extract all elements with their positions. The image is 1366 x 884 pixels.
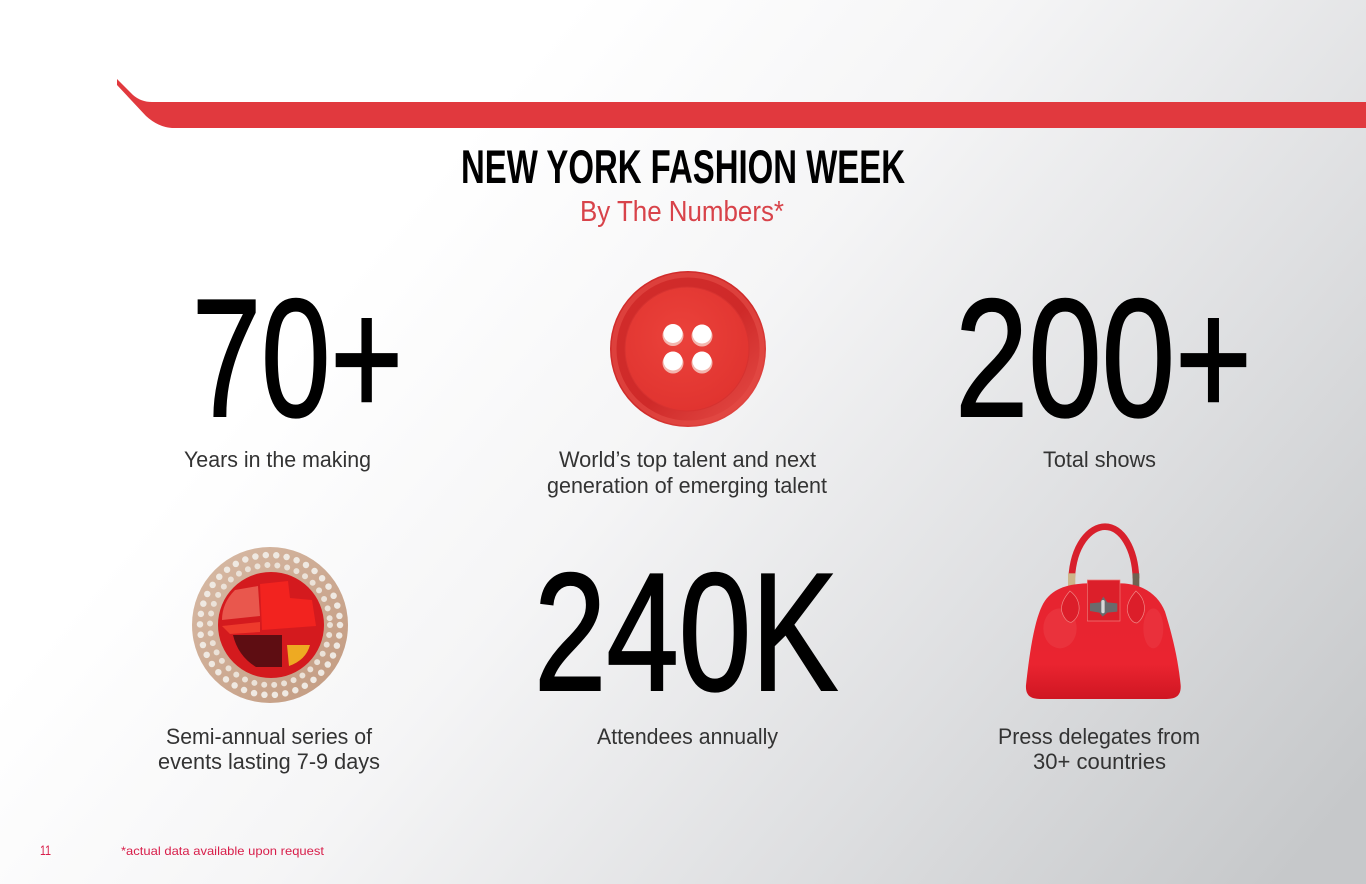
footnote: *actual data available upon request — [121, 844, 325, 858]
caption: talent — [547, 447, 827, 498]
caption: talent: generation of emerging talent — [547, 473, 827, 498]
caption: semi-annual: Semi-annual series of — [166, 724, 373, 749]
icon: red handbag — [1026, 527, 1181, 699]
caption: shows: Total shows — [1043, 447, 1156, 472]
icon: red button — [610, 271, 766, 427]
page number: 11 — [40, 842, 51, 858]
stat: 240K: 240K — [534, 538, 838, 726]
caption: semi-annual: events lasting 7-9 days — [158, 749, 380, 774]
subtitle: By The Numbers* — [580, 196, 784, 228]
caption: talent: World’s top talent and next — [559, 447, 816, 472]
caption: years: Years in the making — [184, 447, 371, 472]
caption: press: Press delegates from — [998, 724, 1200, 749]
title: NEW YORK FASHION WEEK — [461, 140, 905, 193]
stat: 200+: 200+ — [955, 264, 1252, 452]
stat: 70+ — [184, 264, 403, 472]
caption: press: 30+ countries — [1033, 749, 1166, 774]
icon: jewel brooch — [192, 547, 348, 703]
caption: semi-annual — [158, 724, 380, 774]
red banner swoosh — [117, 79, 1366, 128]
stat: 70+: 70+ — [192, 264, 403, 452]
caption: attendees: Attendees annually — [597, 724, 778, 749]
caption: press — [998, 724, 1200, 774]
